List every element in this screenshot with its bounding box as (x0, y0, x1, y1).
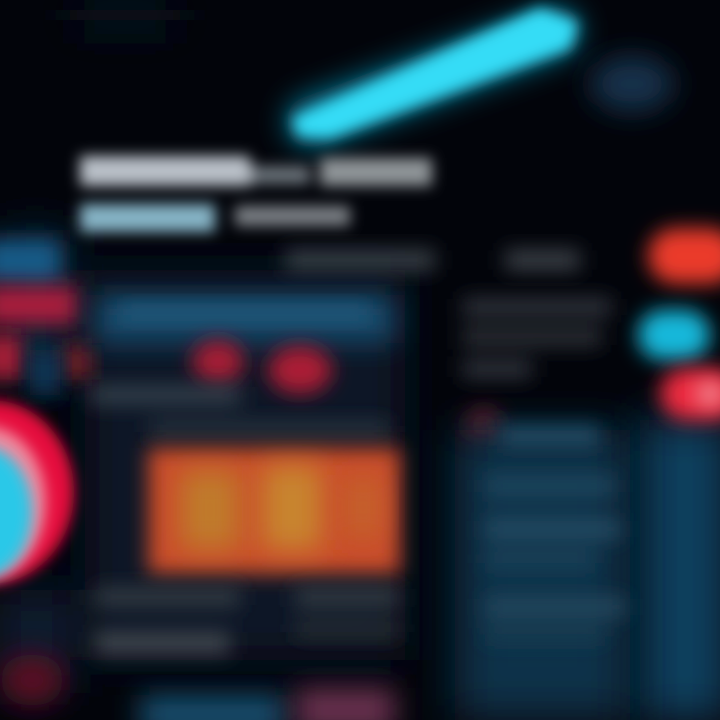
neon cyan bar (292, 8, 578, 138)
gauge chart (0, 400, 74, 584)
icon: red marker left (192, 340, 244, 384)
icon: red and white pill (660, 368, 720, 420)
subtitle text (285, 250, 580, 270)
small red accent (464, 407, 504, 443)
icon: cyan pill (638, 310, 710, 360)
lower text block (95, 588, 400, 654)
title (80, 156, 432, 232)
icon: red pill (648, 228, 720, 284)
bottom strip (0, 654, 395, 720)
panel: central header (95, 295, 395, 394)
panel: left column (0, 240, 92, 395)
central text lines (90, 386, 390, 436)
right column text (462, 298, 612, 378)
top right blue glow (590, 56, 674, 112)
panel: orange highlight block (148, 448, 400, 574)
icon: red marker right (268, 346, 332, 394)
panel: right lower card (455, 426, 630, 720)
